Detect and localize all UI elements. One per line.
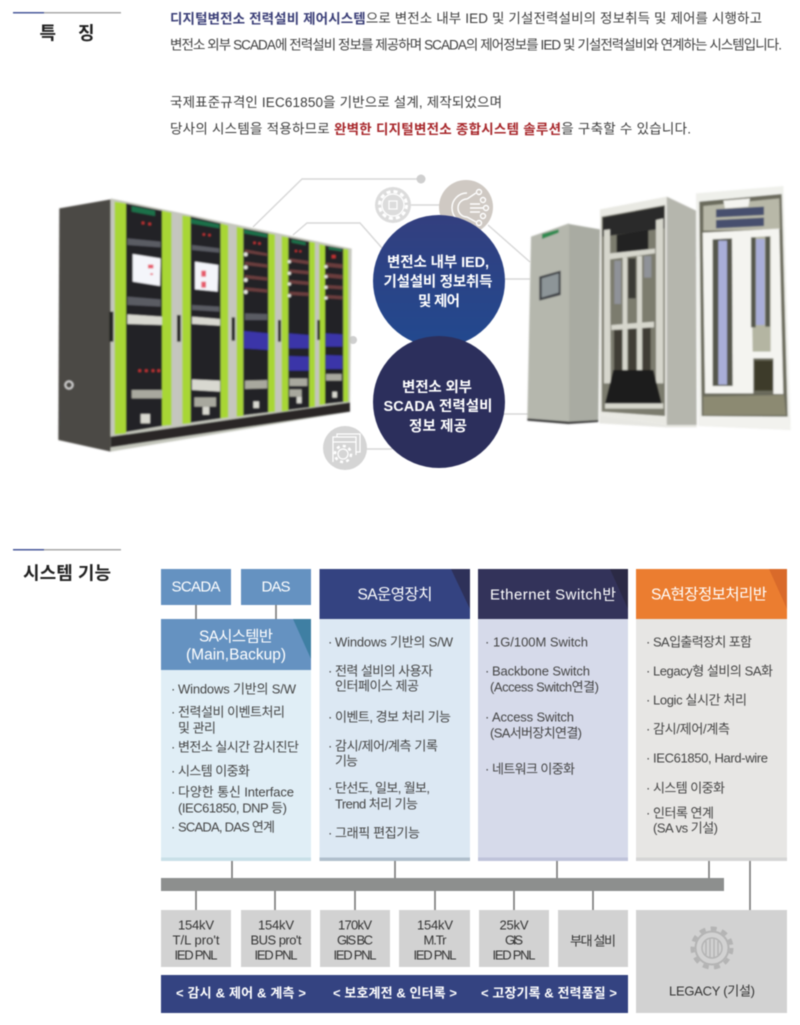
panel: SA system panel: · bbox=[171, 740, 175, 754]
panel: SA operating unit: 단선도, 일보, 월보, bbox=[335, 780, 430, 796]
panel: SA system panel: · bbox=[171, 764, 175, 778]
box: 154kV T/L: T/L pro't bbox=[172, 932, 220, 948]
panel: SA operating unit: · bbox=[328, 634, 332, 650]
connector dots bbox=[349, 174, 426, 344]
box: 25kV GIS: GIS bbox=[505, 932, 523, 948]
box: 154kV T/L bbox=[161, 910, 231, 967]
panel: SA field information panel: · bbox=[646, 750, 650, 766]
panel: SA field information panel: Logic 실시간 처리 bbox=[653, 692, 747, 708]
panel: Ethernet switch panel: · bbox=[485, 634, 489, 650]
box: 154kV T/L: IED PNL bbox=[174, 948, 218, 962]
banner: monitoring protection recording: < 보호계전 & 인터록 > bbox=[333, 986, 457, 1000]
box: 154kV BUS: BUS pro't bbox=[250, 932, 302, 948]
panel: SA field information panel: SA입출력장치 포함 bbox=[653, 634, 752, 650]
callout: external SCADA circle bbox=[373, 336, 505, 468]
panel: SA system panel: 전력설비 이벤트처리 bbox=[178, 704, 285, 720]
panel: SA field information panel: · bbox=[646, 806, 650, 820]
connector lines bbox=[253, 179, 530, 449]
panel: Ethernet switch panel: · bbox=[485, 664, 489, 678]
box: 25kV GIS: 25kV bbox=[500, 918, 529, 932]
panel: SA operating unit: 기능 bbox=[335, 754, 358, 768]
panel: SA field information panel: · bbox=[646, 692, 650, 708]
panel: Ethernet switch panel: 네트워크 이중화 bbox=[492, 762, 575, 776]
photo: field panels bbox=[527, 186, 791, 430]
panel: Ethernet switch panel: · bbox=[485, 710, 489, 724]
panel: Ethernet switch panel: Backbone Switch bbox=[492, 664, 590, 678]
box: 154kV M.Tr: IED PNL bbox=[414, 948, 456, 962]
text block: feature description: 변전소 외부 SCADA에 전력설비 정보를 제공하며 SCADA의 제어정보를 IED 및 기설전력설비와 연계하는 시스템입니다. bbox=[170, 38, 782, 52]
panel: Ethernet switch panel: Ethernet Switch반 bbox=[490, 586, 616, 604]
box: legacy equipment: LEGACY (기설) bbox=[669, 984, 755, 998]
box: 170kV GIS BC: GIS BC bbox=[337, 932, 373, 948]
box: 170kV GIS BC: IED PNL bbox=[334, 948, 376, 962]
callout: external SCADA circle: 변전소 외부 bbox=[402, 379, 472, 396]
panel: SA operating unit: · bbox=[328, 664, 332, 678]
box: 154kV BUS: IED PNL bbox=[254, 948, 298, 962]
text block: feature description: 디지털변전소 전력설비 제어시스템으로 변전소 내부 IED 및 기설전력설비의 정보취득 및 제어를 시행하고 bbox=[170, 11, 762, 26]
panel: SA field information panel: 감시/제어/계측 bbox=[653, 722, 730, 736]
callout: internal IED circle bbox=[373, 215, 505, 347]
connecting lines bbox=[196, 605, 750, 910]
banner: monitoring protection recording: < 고장기록 & 전력품질 > bbox=[481, 986, 617, 1000]
panel: SA system panel: 및 관리 bbox=[178, 720, 216, 736]
panel: SA system panel: 다양한 통신 Interface bbox=[178, 784, 294, 800]
panel: SA field information panel: Legacy형 설비의 SA화 bbox=[653, 664, 773, 678]
panel: SA system panel: · bbox=[171, 704, 175, 720]
panel: SA operating unit: SA운영장치 bbox=[358, 586, 432, 604]
box: 154kV M.Tr: M.Tr bbox=[424, 932, 447, 948]
panel: SA field information panel: SA현장정보처리반 bbox=[651, 586, 767, 604]
panel: SA operating unit: · bbox=[328, 780, 332, 796]
panel: SA field information panel: · bbox=[646, 664, 650, 678]
callout: internal IED circle: 및 제어 bbox=[418, 293, 460, 310]
panel: SA field information panel: 시스템 이중화 bbox=[653, 780, 725, 796]
panel: SA system panel: 시스템 이중화 bbox=[178, 764, 250, 778]
callout: external SCADA circle: 정보 제공 bbox=[409, 418, 467, 435]
panel: SA field information panel: · bbox=[646, 780, 650, 796]
icon: legacy gear bbox=[692, 928, 732, 968]
callout: internal IED circle: 변전소 내부 IED, bbox=[387, 254, 489, 271]
panel: SA operating unit: 전력 설비의 사용자 bbox=[335, 664, 433, 678]
text block: feature description: 당사의 시스템을 적용하므로 완벽한 디지털변전소 종합시스템 솔루션을 구축할 수 있습니다. bbox=[170, 122, 691, 136]
panel: SA operating unit: · bbox=[328, 826, 332, 840]
callout: external SCADA circle: SCADA 전력설비 bbox=[384, 398, 492, 415]
panel: SA operating unit: 이벤트, 경보 처리 기능 bbox=[335, 710, 451, 724]
box: 170kV GIS BC bbox=[320, 910, 390, 967]
box: 154kV BUS: 154kV bbox=[258, 918, 294, 932]
panel: Ethernet switch panel: · bbox=[485, 762, 489, 776]
panel: Ethernet switch panel: (SA서버장치연결) bbox=[490, 726, 582, 740]
box: 154kV M.Tr: 154kV bbox=[417, 918, 453, 932]
panel: SA operating unit: 감시/제어/계측 기록 bbox=[335, 738, 438, 754]
heading: system functions: 시스템 기능 bbox=[23, 564, 111, 584]
box: 154kV BUS bbox=[241, 910, 311, 967]
panel: Ethernet switch panel: Access Switch bbox=[492, 710, 574, 724]
callout: internal IED circle: 기설설비 정보취득 bbox=[384, 274, 492, 290]
box: 25kV GIS bbox=[479, 910, 549, 967]
panel: SA operating unit: Trend 처리 기능 bbox=[335, 796, 418, 812]
icon: network circle bbox=[439, 180, 493, 234]
heading: system functions bbox=[13, 549, 121, 584]
panel: SA system panel: Windows 기반의 S/W bbox=[178, 682, 297, 696]
panel: SA system panel: SA시스템반 bbox=[199, 628, 273, 646]
panel: SA operating unit: 인터페이스 제공 bbox=[335, 678, 419, 694]
panel: SA system panel: (IEC61850, DNP 등) bbox=[178, 800, 287, 816]
panel: SA field information panel: · bbox=[646, 634, 650, 650]
panel: SA system panel: · bbox=[171, 682, 175, 696]
icon: document gear circle bbox=[323, 426, 367, 470]
panel: SA operating unit: 그래픽 편집기능 bbox=[335, 826, 420, 840]
icon: gear circle bbox=[375, 187, 411, 223]
panel: Ethernet switch panel: (Access Switch연결) bbox=[490, 680, 599, 694]
panel: SA field information panel: IEC61850, Hard-wire bbox=[653, 750, 768, 766]
box: auxiliary equipment bbox=[558, 910, 628, 967]
panel: SA field information panel bbox=[636, 569, 787, 861]
box: 25kV GIS: IED PNL bbox=[492, 948, 536, 962]
panel: SA field information panel: (SA vs 기설) bbox=[653, 820, 718, 836]
heading: features: 특 징 bbox=[40, 24, 94, 44]
panel: Ethernet switch panel bbox=[478, 569, 628, 861]
banner: monitoring protection recording: < 감시 & 제어 & 계측 > bbox=[176, 986, 306, 1000]
panel: SA system panel: (Main,Backup) bbox=[186, 646, 286, 664]
box: DAS: DAS bbox=[262, 578, 290, 596]
box: DAS bbox=[241, 569, 311, 605]
box: SCADA: SCADA bbox=[172, 578, 220, 596]
panel: SA operating unit: · bbox=[328, 710, 332, 724]
panel: SA field information panel: 인터록 연계 bbox=[653, 806, 714, 820]
network bus bar bbox=[161, 878, 724, 891]
text block: feature description: 국제표준규격인 IEC61850을 기반으로 설계, 제작되었으며 bbox=[170, 95, 502, 110]
banner: monitoring protection recording bbox=[161, 975, 628, 1013]
box: auxiliary equipment: 부대 설비 bbox=[570, 934, 616, 948]
photo: digital substation cabinets bbox=[58, 198, 352, 452]
panel: SA system panel: · bbox=[171, 820, 175, 834]
panel: SA operating unit: Windows 기반의 S/W bbox=[335, 634, 454, 650]
panel: SA system panel: SCADA, DAS 연계 bbox=[178, 820, 275, 834]
box: legacy equipment bbox=[636, 910, 787, 1013]
box: 154kV T/L: 154kV bbox=[178, 918, 214, 932]
panel: Ethernet switch panel: 1G/100M Switch bbox=[493, 634, 588, 650]
panel: SA system panel: · bbox=[171, 784, 175, 800]
heading: features bbox=[13, 12, 121, 44]
box: SCADA bbox=[161, 569, 231, 605]
panel: SA operating unit: · bbox=[328, 738, 332, 754]
box: 170kV GIS BC: 170kV bbox=[338, 918, 372, 932]
text block: feature description bbox=[170, 11, 782, 136]
panel: SA field information panel: · bbox=[646, 722, 650, 736]
panel: SA system panel: 변전소 실시간 감시진단 bbox=[178, 740, 299, 754]
panel: SA system panel bbox=[161, 619, 311, 861]
panel: SA operating unit bbox=[320, 569, 470, 861]
box: 154kV M.Tr bbox=[399, 910, 470, 967]
